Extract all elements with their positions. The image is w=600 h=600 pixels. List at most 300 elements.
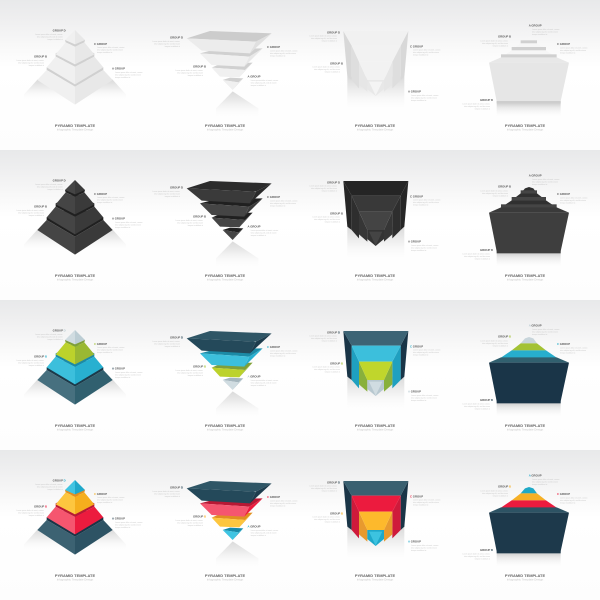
label: group A: tetur adipiscing elit, sed do eiusm — [411, 96, 437, 100]
panel: dark funnel pyramid — [309, 180, 441, 282]
label: group C: tempor incididunt ut — [270, 354, 286, 357]
label: group B: tempor incididunt ut — [29, 364, 45, 367]
label: group D: tempor incididunt ut — [475, 108, 491, 111]
label: group C: tempor incididunt ut — [270, 204, 286, 207]
label: group A: tetur adipiscing elit, sed do eiusm — [532, 180, 558, 184]
chart: upright pyramid — [24, 480, 126, 555]
label: group B: Lorem ipsum dolor sit amet, consec — [175, 219, 203, 222]
label: group C: C GROUP — [267, 45, 280, 49]
row 1: white pyramids — [0, 0, 600, 150]
chart: inverted pyramid — [187, 481, 272, 569]
label: group C: tetur adipiscing elit, sed do eiusm — [413, 501, 439, 504]
label: group B: tetur adipiscing elit, sed do eiusm — [482, 342, 509, 345]
label: group A: A GROUP — [248, 525, 261, 529]
label: group D: Lorem ipsum dolor sit amet, consec — [152, 490, 180, 493]
label: group B: tempor incididunt ut — [188, 524, 204, 527]
label: group C: Lorem ipsum dolor sit amet, consec — [97, 46, 125, 49]
title: PYRAMID TEMPLATE — [205, 423, 245, 428]
label: group A: A GROUP — [408, 239, 421, 243]
label: group C: tempor incididunt ut — [413, 504, 429, 507]
label: group B: Lorem ipsum dolor sit amet, consec — [480, 489, 508, 492]
label: group D: tempor incididunt ut — [322, 190, 338, 193]
label: group C: tetur adipiscing elit, sed do eiusm — [413, 351, 439, 354]
label: group C: C GROUP — [557, 192, 570, 196]
label: group D: GROUP D — [170, 185, 183, 189]
label: group A: Lorem ipsum dolor sit amet, consec — [411, 244, 439, 247]
label: group C: Lorem ipsum dolor sit amet, consec — [413, 349, 441, 352]
label: group D: tempor incididunt ut — [165, 495, 181, 498]
label: group B: tempor incididunt ut — [325, 71, 341, 74]
label: group C: tetur adipiscing elit, sed do eiusm — [97, 49, 123, 52]
panel: white stepped pyramid — [462, 23, 588, 132]
label: group A — [529, 323, 560, 336]
label: group A: A GROUP — [112, 67, 125, 71]
label: group A — [529, 173, 560, 186]
label: group A: Lorem ipsum dolor sit amet, consec — [251, 79, 278, 82]
label: group D: Lorem ipsum dolor sit amet, consec — [309, 335, 337, 338]
label: group D: tempor incididunt ut — [165, 345, 181, 348]
label: group C: Lorem ipsum dolor sit amet, consec — [97, 196, 125, 199]
label: group A: A GROUP — [529, 473, 542, 477]
label: group C: Lorem ipsum dolor sit amet, consec — [560, 496, 588, 499]
title: PYRAMID TEMPLATE — [205, 273, 245, 278]
label: group A: tetur adipiscing elit, sed do eiusm — [115, 374, 141, 376]
label: group D: tempor incididunt ut — [47, 188, 63, 191]
chart: stepped pyramid — [489, 37, 569, 118]
label: group B: tetur adipiscing elit, sed do eiusm — [18, 62, 45, 64]
label: group D: GROUP D — [480, 398, 493, 402]
label: group D — [309, 180, 340, 193]
label: group D: tempor incididunt ut — [165, 195, 181, 198]
label: group B: tetur adipiscing elit, sed do eiusm — [314, 518, 341, 521]
label: group C: tempor incididunt ut — [560, 351, 576, 354]
label: group A: tempor incididunt ut — [115, 226, 131, 229]
label: group B: tempor incididunt ut — [29, 214, 45, 217]
title: PYRAMID TEMPLATE — [55, 573, 95, 578]
label: group C: tetur adipiscing elit, sed do eiusm — [270, 202, 296, 205]
label: group D: tempor incididunt ut — [322, 340, 338, 343]
label: group A — [112, 67, 143, 79]
label: group A: tetur adipiscing elit, sed do eiusm — [251, 82, 277, 84]
label: group A — [248, 375, 278, 387]
label: group B: tetur adipiscing elit, sed do eiusm — [18, 212, 45, 214]
label: group C — [94, 492, 125, 504]
label: group D: tetur adipiscing elit, sed do eiusm — [311, 337, 338, 340]
panel: dark inverted pyramid — [152, 181, 298, 282]
label: group C: tempor incididunt ut — [97, 51, 113, 54]
label: group B — [480, 35, 511, 47]
label: group C: tempor incididunt ut — [413, 354, 429, 357]
label: group A: Lorem ipsum dolor sit amet, consec — [251, 529, 278, 532]
label: group A: Lorem ipsum dolor sit amet, consec — [532, 478, 560, 481]
label: group B: GROUP B — [330, 511, 343, 515]
label: group D: Lorem ipsum dolor sit amet, consec — [462, 103, 490, 106]
label: group B: GROUP B — [498, 185, 511, 189]
label: group D: GROUP D — [53, 179, 66, 183]
label: group D — [35, 479, 66, 491]
label: group B: GROUP B — [34, 55, 47, 59]
label: group D: Lorem ipsum dolor sit amet, consec — [152, 40, 180, 43]
label: group D: Lorem ipsum dolor sit amet, consec — [35, 333, 63, 336]
chart: funnel pyramid — [343, 331, 408, 412]
label: group D: tetur adipiscing elit, sed do eiusm — [464, 105, 491, 108]
label: group D: tetur adipiscing elit, sed do eiusm — [154, 192, 181, 195]
label: group C: Lorem ipsum dolor sit amet, consec — [560, 46, 588, 49]
label: group A: A GROUP — [408, 539, 421, 543]
label: group D: tetur adipiscing elit, sed do eiusm — [154, 42, 181, 45]
label: group A: A GROUP — [408, 389, 421, 393]
label: group C: tetur adipiscing elit, sed do eiusm — [560, 349, 586, 352]
label: group C: C GROUP — [267, 195, 280, 199]
label: group B: tetur adipiscing elit, sed do eiusm — [314, 368, 341, 371]
title: PYRAMID TEMPLATE — [55, 423, 95, 428]
label: group B: tetur adipiscing elit, sed do eiusm — [18, 512, 45, 514]
label: group D — [152, 485, 183, 498]
label: group C — [94, 192, 125, 204]
label: group C — [410, 494, 441, 507]
panel: red funnel pyramid — [309, 480, 441, 582]
title: PYRAMID TEMPLATE — [505, 423, 545, 428]
label: group A: A GROUP — [248, 225, 261, 229]
label: group D: tetur adipiscing elit, sed do eiusm — [154, 492, 181, 495]
label: group D: tetur adipiscing elit, sed do eiusm — [37, 35, 63, 38]
label: group B: GROUP B — [34, 505, 47, 509]
label: group C: C GROUP — [557, 492, 570, 496]
label: group D — [462, 98, 493, 111]
label: group B: GROUP B — [330, 361, 343, 365]
label: group A: tempor incididunt ut — [411, 99, 427, 102]
subtitle: Infographic Template Design — [357, 428, 394, 432]
label: group B — [480, 485, 511, 497]
label: group C: Lorem ipsum dolor sit amet, consec — [97, 346, 125, 349]
label: group C: Lorem ipsum dolor sit amet, consec — [270, 499, 298, 502]
row 2: dark pyramids — [0, 150, 600, 300]
label: group B — [16, 55, 47, 67]
label: group C: C GROUP — [267, 495, 280, 499]
label: group C — [557, 342, 588, 354]
label: group A: tempor incididunt ut — [532, 183, 548, 186]
label: group B: GROUP B — [498, 35, 511, 39]
label: group D: tetur adipiscing elit, sed do eiusm — [154, 342, 181, 345]
label: group D: Lorem ipsum dolor sit amet, consec — [462, 403, 490, 406]
label: group B: Lorem ipsum dolor sit amet, consec — [175, 69, 203, 72]
label: group B: Lorem ipsum dolor sit amet, consec — [312, 516, 340, 519]
label: group A: tetur adipiscing elit, sed do eiusm — [411, 246, 437, 250]
label: group B: tempor incididunt ut — [325, 371, 341, 374]
chart: funnel pyramid — [343, 181, 408, 262]
chart: upright pyramid — [24, 330, 126, 405]
label: group D: GROUP D — [480, 248, 493, 252]
label: group B: tetur adipiscing elit, sed do eiusm — [177, 222, 204, 224]
label: group C: tempor incididunt ut — [97, 501, 113, 504]
label: group D: Lorem ipsum dolor sit amet, consec — [35, 33, 63, 36]
label: group A: Lorem ipsum dolor sit amet, consec — [115, 71, 143, 74]
label: group D — [309, 330, 340, 343]
label: group D: GROUP D — [327, 30, 340, 34]
label: group A: tetur adipiscing elit, sed do eiusm — [251, 232, 277, 234]
label: group C: C GROUP — [557, 42, 570, 46]
label: group A: Lorem ipsum dolor sit amet, consec — [411, 94, 439, 97]
label: group C: Lorem ipsum dolor sit amet, consec — [413, 199, 441, 202]
label: group B: GROUP B — [193, 514, 206, 518]
label: group D: tetur adipiscing elit, sed do eiusm — [311, 487, 338, 490]
panel: red upright pyramid — [16, 479, 143, 582]
panel: dark upright pyramid — [16, 179, 143, 282]
panel: teal stepped pyramid — [462, 323, 588, 432]
label: group C: C GROUP — [410, 194, 423, 198]
label: group B: Lorem ipsum dolor sit amet, consec — [175, 369, 203, 372]
label: group D: Lorem ipsum dolor sit amet, consec — [35, 483, 63, 486]
label: group C — [267, 195, 298, 207]
label: group A — [529, 473, 560, 486]
label: group B: tetur adipiscing elit, sed do eiusm — [482, 492, 509, 495]
title: PYRAMID TEMPLATE — [55, 273, 95, 278]
label: group C — [410, 344, 441, 357]
label: group C: tempor incididunt ut — [413, 54, 429, 57]
panel: white inverted pyramid — [152, 31, 298, 132]
subtitle: Infographic Template Design — [357, 128, 394, 132]
label: group C — [410, 44, 441, 57]
label: group C: tempor incididunt ut — [97, 201, 113, 204]
label: group C — [94, 42, 125, 54]
label: group C: tempor incididunt ut — [413, 204, 429, 207]
row 4: red and yellow pyramids — [0, 450, 600, 600]
label: group B: Lorem ipsum dolor sit amet, consec — [16, 59, 44, 62]
label: group D: tempor incididunt ut — [475, 558, 491, 561]
label: group D: Lorem ipsum dolor sit amet, consec — [309, 485, 337, 488]
chart: stepped pyramid — [489, 187, 569, 268]
label: group D — [152, 185, 183, 198]
panel: red stepped pyramid — [462, 473, 588, 582]
label: group B: Lorem ipsum dolor sit amet, consec — [312, 66, 340, 69]
chart: upright pyramid — [24, 30, 126, 105]
label: group A — [112, 217, 143, 229]
label: group D: Lorem ipsum dolor sit amet, consec — [152, 190, 180, 193]
label: group C: tempor incididunt ut — [560, 201, 576, 204]
chart: inverted pyramid — [187, 181, 272, 269]
label: group D: GROUP D — [53, 29, 66, 33]
label: group B: GROUP B — [498, 335, 511, 339]
label: group D: GROUP D — [170, 335, 183, 339]
label: group C: C GROUP — [94, 492, 107, 496]
label: group B: Lorem ipsum dolor sit amet, consec — [16, 209, 44, 212]
label: group D — [152, 335, 183, 348]
panel: teal inverted pyramid — [152, 331, 298, 432]
label: group B: tetur adipiscing elit, sed do eiusm — [482, 42, 509, 45]
label: group D — [309, 480, 340, 493]
label: group B: tetur adipiscing elit, sed do eiusm — [482, 192, 509, 195]
chart: stepped pyramid — [489, 487, 569, 568]
label: group D — [462, 398, 493, 411]
label: group B: Lorem ipsum dolor sit amet, consec — [480, 339, 508, 342]
label: group D: tempor incididunt ut — [475, 408, 491, 411]
label: group C: tetur adipiscing elit, sed do eiusm — [413, 51, 439, 54]
label: group A: tetur adipiscing elit, sed do eiusm — [251, 532, 277, 534]
label: group D: GROUP D — [327, 480, 340, 484]
label: group D: tetur adipiscing elit, sed do eiusm — [464, 255, 491, 258]
label: group A — [408, 389, 439, 402]
subtitle: Infographic Template Design — [207, 278, 244, 282]
label: group D: Lorem ipsum dolor sit amet, consec — [462, 253, 490, 256]
label: group C: tetur adipiscing elit, sed do eiusm — [560, 49, 586, 52]
label: group B: tetur adipiscing elit, sed do eiusm — [177, 72, 204, 74]
label: group B: Lorem ipsum dolor sit amet, consec — [480, 39, 508, 42]
label: group B: tempor incididunt ut — [493, 344, 509, 347]
label: group B: tetur adipiscing elit, sed do eiusm — [314, 218, 341, 221]
label: group B: GROUP B — [330, 61, 343, 65]
label: group B: tempor incididunt ut — [325, 521, 341, 524]
label: group C: tempor incididunt ut — [270, 504, 286, 507]
chart: stepped pyramid — [489, 337, 569, 418]
title: PYRAMID TEMPLATE — [355, 423, 395, 428]
title: PYRAMID TEMPLATE — [355, 573, 395, 578]
label: group C: tempor incididunt ut — [560, 501, 576, 504]
background band — [0, 0, 600, 150]
label: group A: Lorem ipsum dolor sit amet, consec — [532, 28, 560, 31]
label: group B — [16, 505, 47, 517]
label: group B: tempor incididunt ut — [29, 64, 45, 67]
label: group D: tempor incididunt ut — [165, 45, 181, 48]
label: group A — [112, 367, 143, 379]
label: group A: tempor incididunt ut — [251, 234, 266, 237]
label: group A: Lorem ipsum dolor sit amet, consec — [115, 221, 143, 224]
background band — [0, 300, 600, 450]
label: group B: Lorem ipsum dolor sit amet, consec — [312, 216, 340, 219]
subtitle: Infographic Template Design — [357, 278, 394, 282]
chart: inverted pyramid — [187, 331, 272, 419]
label: group D: GROUP D — [170, 485, 183, 489]
label: group C: C GROUP — [410, 344, 423, 348]
label: group D: GROUP D — [480, 98, 493, 102]
title: PYRAMID TEMPLATE — [205, 123, 245, 128]
panel: teal upright pyramid — [16, 329, 143, 432]
label: group A: tetur adipiscing elit, sed do eiusm — [411, 396, 437, 400]
background band — [0, 450, 600, 600]
label: group D — [35, 29, 66, 41]
label: group D: tetur adipiscing elit, sed do eiusm — [37, 485, 63, 488]
subtitle: Infographic Template Design — [57, 278, 94, 282]
panel: teal funnel pyramid — [309, 330, 441, 432]
label: group B: tempor incididunt ut — [188, 374, 204, 377]
subtitle: Infographic Template Design — [507, 278, 544, 282]
label: group A: A GROUP — [529, 323, 542, 327]
label: group B: tetur adipiscing elit, sed do eiusm — [177, 372, 204, 374]
label: group B — [312, 211, 343, 224]
label: group D: Lorem ipsum dolor sit amet, consec — [35, 183, 63, 186]
label: group A: A GROUP — [248, 75, 261, 79]
label: group B: tetur adipiscing elit, sed do eiusm — [314, 68, 341, 71]
label: group D: tempor incididunt ut — [47, 488, 63, 491]
label: group D — [152, 35, 183, 48]
label: group B — [312, 361, 343, 374]
label: group B: GROUP B — [193, 214, 206, 218]
label: group C — [94, 342, 125, 354]
label: group C: tetur adipiscing elit, sed do eiusm — [270, 52, 296, 55]
subtitle: Infographic Template Design — [207, 578, 244, 582]
panel: white funnel pyramid — [309, 30, 441, 132]
label: group B: Lorem ipsum dolor sit amet, consec — [175, 519, 203, 522]
chart: inverted pyramid — [187, 31, 272, 119]
label: group A: Lorem ipsum dolor sit amet, consec — [115, 521, 143, 524]
label: group B — [175, 64, 206, 77]
label: group A: tetur adipiscing elit, sed do eiusm — [532, 330, 558, 334]
label: group A — [408, 539, 439, 552]
subtitle: Infographic Template Design — [507, 428, 544, 432]
chart: funnel pyramid — [343, 481, 408, 562]
label: group A: tempor incididunt ut — [411, 399, 427, 402]
label: group A: tetur adipiscing elit, sed do eiusm — [411, 546, 437, 550]
subtitle: Infographic Template Design — [57, 428, 94, 432]
label: group B: GROUP B — [34, 355, 47, 359]
label: group C — [267, 345, 298, 357]
label: group A: tetur adipiscing elit, sed do eiusm — [532, 480, 558, 484]
label: group C: C GROUP — [94, 342, 107, 346]
label: group D: GROUP D — [53, 479, 66, 483]
label: group B: tempor incididunt ut — [29, 514, 45, 517]
panel: dark stepped pyramid — [462, 173, 588, 282]
label: group C: tempor incididunt ut — [560, 51, 576, 54]
label: group D: Lorem ipsum dolor sit amet, consec — [309, 185, 337, 188]
label: group D: GROUP D — [53, 329, 66, 333]
label: group C: C GROUP — [410, 494, 423, 498]
label: group D: tempor incididunt ut — [322, 490, 338, 493]
label: group D: Lorem ipsum dolor sit amet, consec — [152, 340, 180, 343]
label: group C: tempor incididunt ut — [97, 351, 113, 354]
label: group D: GROUP D — [327, 330, 340, 334]
label: group C: Lorem ipsum dolor sit amet, consec — [413, 499, 441, 502]
label: group D: GROUP D — [170, 35, 183, 39]
label: group A: A GROUP — [529, 23, 542, 27]
label: group C: C GROUP — [557, 342, 570, 346]
label: group A: tempor incididunt ut — [251, 534, 266, 537]
label: group A: tempor incididunt ut — [251, 84, 266, 87]
label: group D: tetur adipiscing elit, sed do eiusm — [311, 187, 338, 190]
label: group B: tempor incididunt ut — [493, 44, 509, 47]
label: group D: tetur adipiscing elit, sed do eiusm — [311, 37, 338, 40]
label: group A: tempor incididunt ut — [411, 549, 427, 552]
label: group D — [35, 329, 66, 341]
label: group C: tetur adipiscing elit, sed do eiusm — [97, 499, 123, 502]
label: group A — [248, 75, 278, 87]
label: group A: A GROUP — [112, 217, 125, 221]
label: group B: tetur adipiscing elit, sed do eiusm — [18, 362, 45, 364]
label: group B — [175, 364, 206, 377]
label: group C — [557, 492, 588, 504]
title: PYRAMID TEMPLATE — [505, 123, 545, 128]
subtitle: Infographic Template Design — [507, 128, 544, 132]
panel: white upright pyramid — [16, 29, 143, 132]
label: group D: tempor incididunt ut — [475, 258, 491, 261]
label: group B: GROUP B — [330, 211, 343, 215]
label: group B: tempor incididunt ut — [188, 224, 204, 227]
label: group C: C GROUP — [267, 345, 280, 349]
label: group D: tetur adipiscing elit, sed do eiusm — [37, 335, 63, 338]
label: group C: tetur adipiscing elit, sed do eiusm — [413, 201, 439, 204]
label: group B: tempor incididunt ut — [493, 194, 509, 197]
label: group D: tetur adipiscing elit, sed do eiusm — [464, 405, 491, 408]
label: group A: tempor incididunt ut — [115, 526, 131, 529]
label: group B — [16, 205, 47, 217]
label: group A: A GROUP — [529, 173, 542, 177]
label: group A: tempor incididunt ut — [115, 76, 131, 79]
label: group B — [312, 511, 343, 524]
label: group B: tetur adipiscing elit, sed do eiusm — [177, 522, 204, 524]
label: group A: A GROUP — [248, 375, 261, 379]
label: group A: A GROUP — [112, 517, 125, 521]
label: group A: Lorem ipsum dolor sit amet, consec — [532, 328, 560, 331]
label: group A: tempor incididunt ut — [251, 384, 266, 387]
label: group D — [35, 179, 66, 191]
